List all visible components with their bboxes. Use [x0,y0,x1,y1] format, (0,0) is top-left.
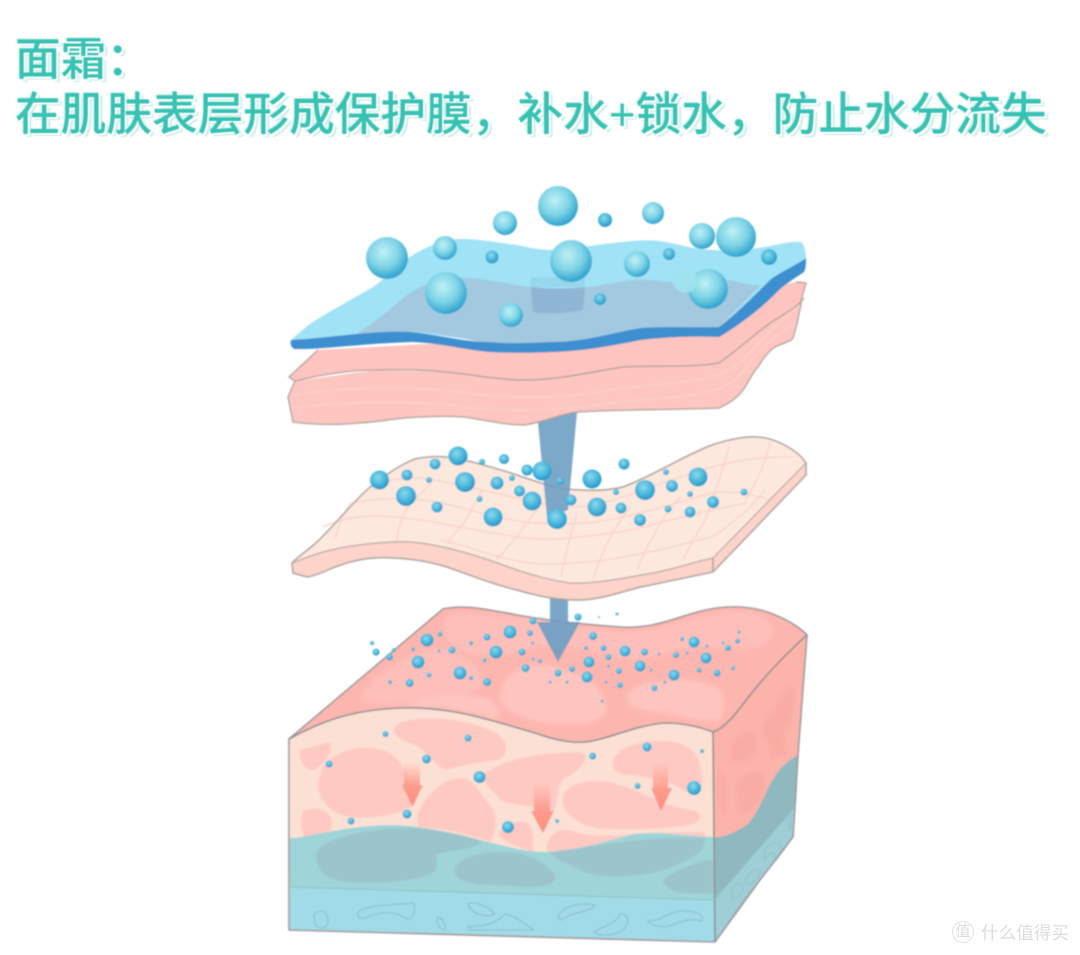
pink striations [290,305,802,410]
layer 3: skin block [289,607,807,942]
block top face [289,607,807,742]
film gray panel [351,278,761,344]
sheet side [292,463,806,600]
pink outline [288,282,806,425]
arrow: down red 1 [402,762,423,807]
water bubbles on film [366,186,777,327]
skin cells [300,718,705,852]
film notch [531,277,585,287]
layer 1: moisture film [291,239,806,353]
arrow: down red 3 [651,763,672,811]
water band [289,825,714,900]
arrow: blue down to block [537,590,580,662]
layer 1: stratum pink [288,282,806,425]
arrow: blue down through sheet [537,412,577,517]
title line 1: 面霜： [15,34,152,85]
block right face [713,635,807,942]
title line 2: 在肌肤表层形成保护膜，补水+锁水，防止水分流失 [15,89,1047,140]
watermark [952,921,1069,943]
film notch lower [531,287,585,313]
block outlines [289,607,807,942]
film blue edge [291,258,806,353]
film top surface [291,239,806,342]
water drops in front of arrow [532,458,748,529]
water drops on sheet [370,446,542,526]
watermark logo [952,921,974,943]
dark cells under water [316,828,713,894]
pink top [289,282,806,381]
sheet outline [292,437,806,600]
title [15,34,1050,140]
subcutaneous outlines [314,903,703,935]
watermark text: 什么值得买 [981,923,1069,943]
sheet grid lines [323,442,793,580]
block front face [289,708,715,942]
sheet top [292,437,806,583]
watermark logo: 值 [955,923,970,940]
small water drops on block [326,612,740,833]
arrow: down red 2 [531,783,554,833]
layer 2: grid sheet [292,437,806,600]
pink front [288,283,806,425]
